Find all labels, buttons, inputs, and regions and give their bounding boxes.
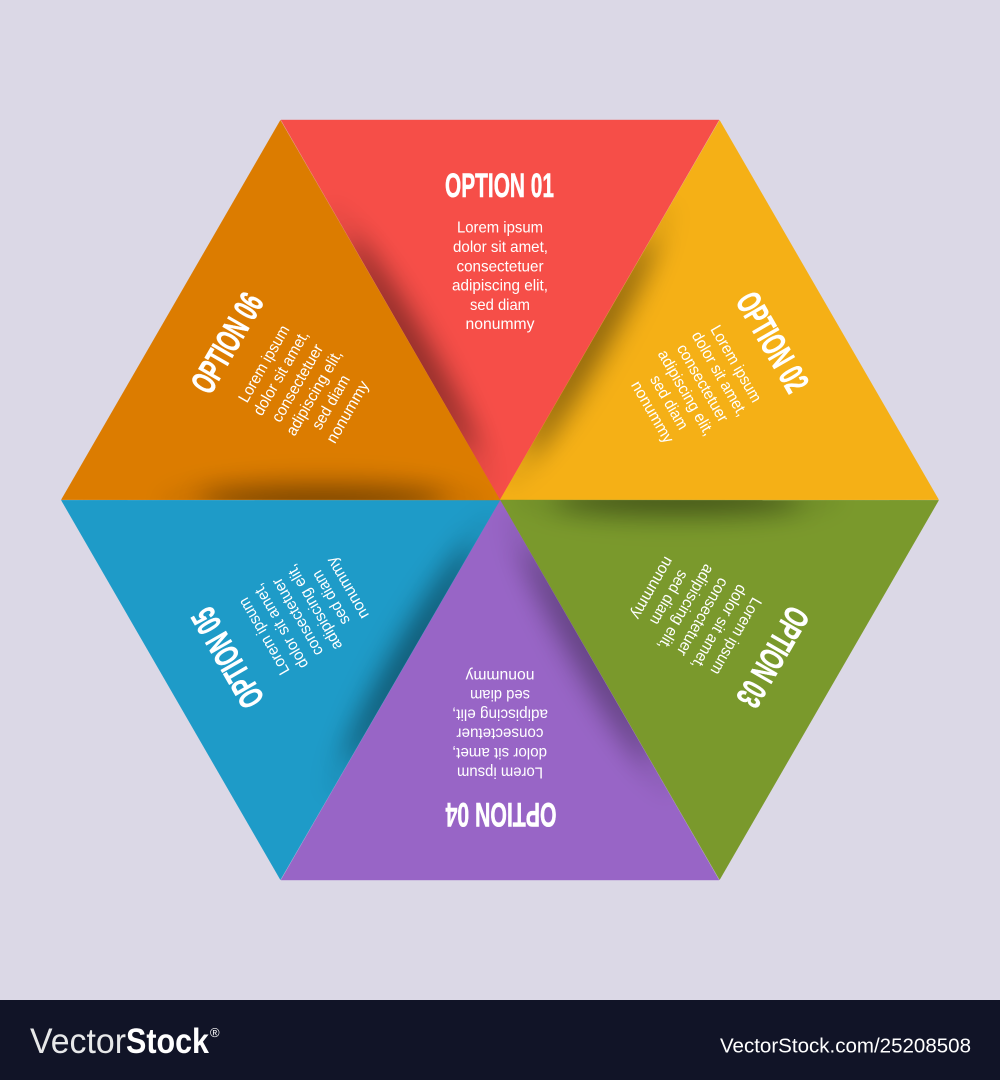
text block: option 01 body: sed diam — [470, 297, 530, 314]
text block: option 04 body: nonummy — [466, 667, 534, 684]
text block: option 01 body: consectetuer — [456, 258, 544, 275]
text block: option 05 body: dolor sit amet, — [250, 580, 312, 671]
text block: option 01 body: adipiscing elit, — [452, 278, 548, 295]
text block: option 01 body: Lorem ipsum — [457, 220, 543, 237]
text block: option 03 body: adipiscing elit, — [654, 561, 717, 653]
footer logo: VectorStock: Stock — [126, 1022, 209, 1061]
text block: option 03 body: nonummy — [627, 554, 676, 622]
text block: option 01 body: nonummy — [466, 316, 534, 333]
text block: option 06 body — [233, 318, 380, 458]
text block: option 04 body: sed diam — [470, 686, 530, 703]
heading: option 02: OPTION 02 — [728, 286, 815, 399]
text block: option 05 body: sed diam — [309, 567, 354, 628]
panel: option 02 yellow triangle — [500, 120, 939, 500]
panel: option 03 green triangle — [500, 500, 939, 880]
text block: option 06 body: consectetuer — [269, 341, 327, 425]
text block: option 02 body: sed diam — [646, 372, 691, 433]
text block: option 02 body: nonummy — [627, 378, 676, 446]
text block: option 05 body: nonummy — [324, 554, 373, 622]
heading: option 04: OPTION 04 — [446, 795, 556, 833]
panel: option 04 purple triangle — [281, 495, 719, 880]
text block: option 02 body: dolor sit amet, — [688, 329, 750, 420]
triangle: green — [500, 500, 939, 880]
panel: option 05 blue triangle — [61, 500, 500, 880]
heading: option 06: OPTION 06 — [184, 287, 272, 400]
text block: option 03 body: sed diam — [646, 567, 691, 628]
text block: option 04 body — [452, 667, 548, 780]
text block: option 06 body: nonummy — [324, 378, 373, 446]
text block: option 03 body: consectetuer — [673, 575, 731, 659]
footer logo: VectorStock — [30, 1022, 220, 1061]
footer image id text: VectorStock.com/25208508 — [720, 1034, 971, 1058]
heading: option 03: OPTION 03 — [728, 600, 816, 713]
text block: option 04 body: adipiscing elit, — [452, 705, 548, 722]
text block: option 02 body — [620, 318, 767, 458]
panel: option 01 red triangle — [281, 120, 719, 505]
text block: option 06 body: Lorem ipsum — [236, 323, 293, 406]
text block: option 05 body — [233, 542, 380, 682]
footer logo: VectorStock: Vector — [30, 1022, 126, 1061]
text block: option 02 body: adipiscing elit, — [654, 347, 717, 439]
text block: option 05 body: consectetuer — [269, 574, 327, 659]
triangle: blue — [61, 500, 500, 880]
triangle: orange — [61, 120, 500, 500]
text block: option 03 body: dolor sit amet, — [687, 581, 750, 672]
text block: option 01 body — [452, 220, 548, 333]
triangle: yellow — [500, 120, 939, 500]
triangle: red — [281, 120, 719, 505]
footer bar — [0, 1000, 1000, 1080]
text block: option 03 body: Lorem ipsum — [707, 594, 764, 677]
text block: option 05 body: Lorem ipsum — [236, 594, 293, 677]
text block: option 04 body: consectetuer — [456, 725, 544, 742]
text block: option 06 body: sed diam — [309, 372, 354, 433]
text block: option 02 body: consectetuer — [673, 341, 731, 426]
panel: option 06 orange triangle — [61, 120, 500, 500]
text block: option 01 body: dolor sit amet, — [453, 239, 548, 256]
heading: option 01: OPTION 01 — [445, 167, 554, 205]
text block: option 06 body: dolor sit amet, — [250, 328, 313, 419]
text block: option 04 body: dolor sit amet, — [452, 744, 547, 761]
text block: option 02 body: Lorem ipsum — [707, 323, 764, 406]
text block: option 04 body: Lorem ipsum — [457, 763, 543, 780]
text block: option 06 body: adipiscing elit, — [283, 347, 346, 439]
heading: option 05: OPTION 05 — [185, 601, 272, 714]
text block: option 03 body — [620, 542, 767, 682]
footer logo: VectorStock: ® — [210, 1025, 220, 1040]
text block: option 05 body: adipiscing elit, — [283, 561, 346, 653]
triangle: purple — [281, 495, 719, 880]
